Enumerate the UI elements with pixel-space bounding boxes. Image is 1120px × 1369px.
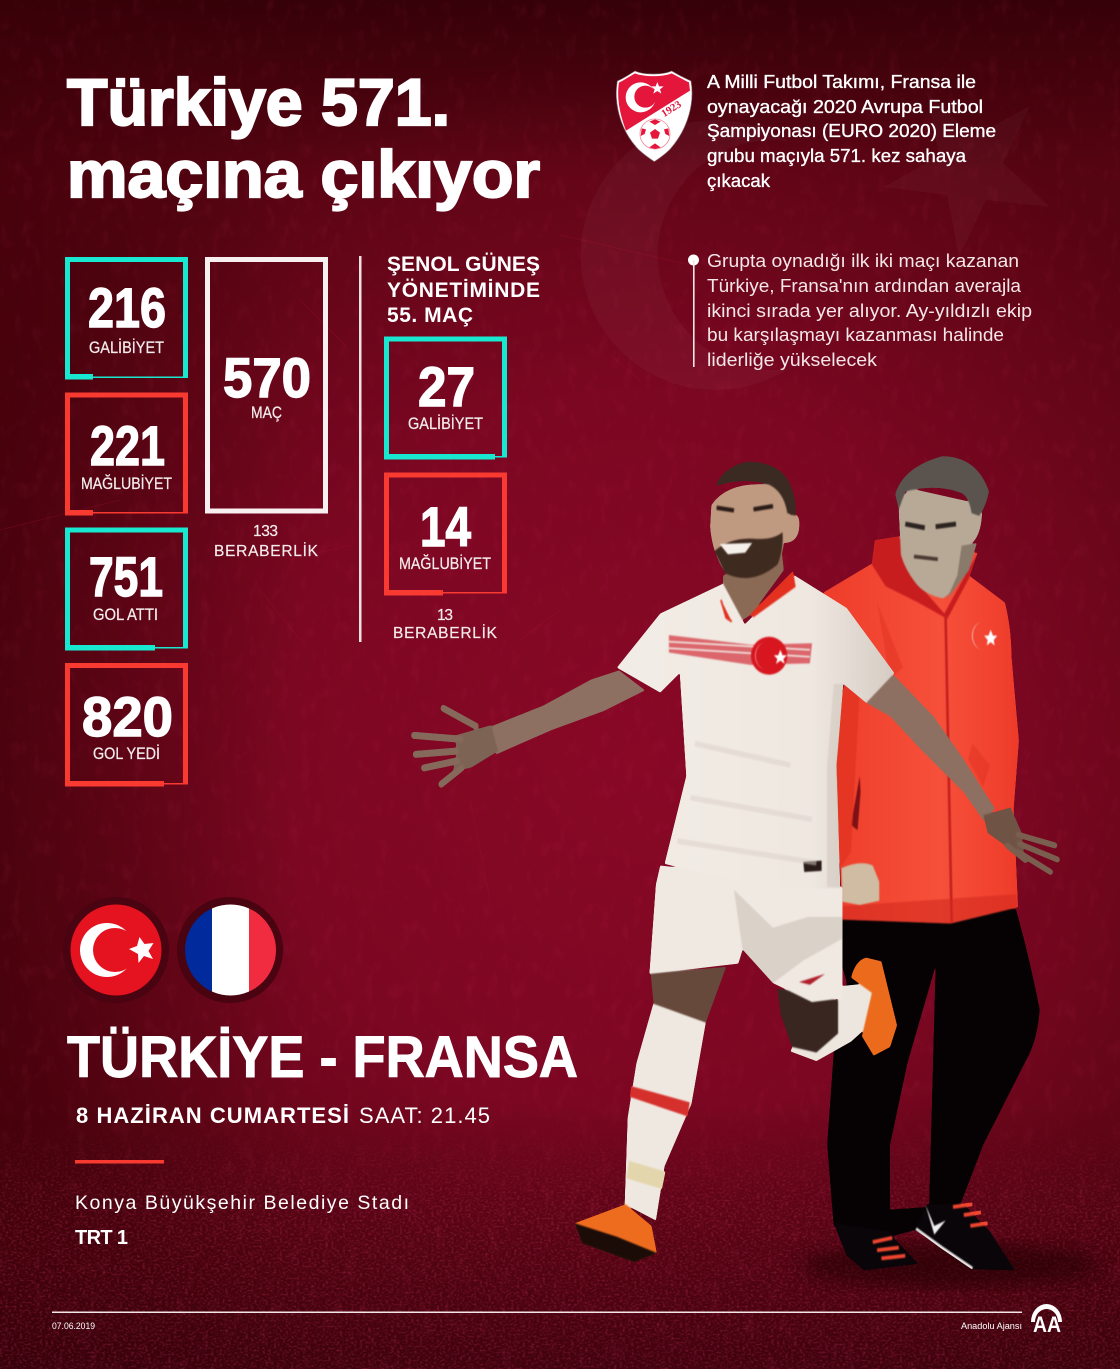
icon: Anadolu Agency logo: AA <box>1033 1312 1061 1337</box>
footer agency name: Anadolu Ajansı <box>961 1321 1022 1331</box>
stat box: 570 matches: MAÇ <box>251 404 282 422</box>
faint background crescent and star <box>581 93 1050 390</box>
stat box: 221 losses <box>65 395 188 516</box>
title <box>67 65 540 211</box>
player shorts <box>649 865 842 1002</box>
stat box: 820 goals conceded <box>65 666 188 786</box>
player left leg <box>625 967 726 1220</box>
bullet text with marker <box>688 250 1032 370</box>
player planted boot <box>575 1204 657 1262</box>
player shirt <box>617 573 894 889</box>
stat box: 820 goals conceded: GOL YEDİ <box>93 744 160 763</box>
draws: 133: BERABERLİK <box>214 542 319 560</box>
icon: Anadolu Agency logo <box>1031 1304 1062 1337</box>
stat box: 570 matches <box>208 260 326 511</box>
player neck <box>723 551 784 625</box>
bullet text with marker: Türkiye, Fransa'nın ardından averajla <box>707 275 1022 296</box>
player right arm and hand <box>866 673 1057 872</box>
footer date: 07.06.2019 <box>52 1321 95 1331</box>
stat box: 27 wins: 27 <box>418 355 475 418</box>
player raised boot <box>851 958 897 1056</box>
title: Türkiye 571. <box>67 65 450 139</box>
draws: 133: 133 <box>253 523 278 540</box>
player right leg <box>777 982 882 1061</box>
draws: 13: BERABERLİK <box>393 624 498 642</box>
draws: 133 <box>214 523 319 560</box>
intro text: grubu maçıyla 571. kez sahaya <box>707 145 967 166</box>
intro text: A Milli Futbol Takımı, Fransa ile <box>707 71 976 92</box>
stat box: 14 losses <box>384 475 507 596</box>
intro text: oynayacağı 2020 Avrupa Futbol <box>707 96 983 117</box>
icon: Turkish Football Federation crest: 1923 <box>660 99 684 120</box>
flag: France <box>177 897 283 1003</box>
coach right shoe <box>873 1204 1015 1270</box>
player figure <box>414 462 1057 1262</box>
stat box: 14 losses: MAĞLUBİYET <box>399 554 491 573</box>
icon: Turkish Football Federation crest <box>616 71 692 162</box>
coach figure <box>823 456 1040 1270</box>
stat box: 751 goals scored: GOL ATTI <box>93 606 158 624</box>
stat box: 216 wins <box>65 260 188 380</box>
stat box: 216 wins: GALİBİYET <box>89 338 164 357</box>
ground shadow under players <box>800 1243 1100 1287</box>
intro text: Şampiyonası (EURO 2020) Eleme <box>707 120 996 141</box>
stat box: 14 losses: 14 <box>420 495 471 558</box>
bullet text with marker: Grupta oynadığı ilk iki maçı kazanan <box>707 250 1019 271</box>
intro text <box>707 71 996 191</box>
draws: 13 <box>393 607 498 642</box>
coach head <box>895 456 989 600</box>
bullet text with marker: ikinci sırada yer alıyor. Ay-yıldızlı ekip <box>707 300 1032 321</box>
stat box: 221 losses: MAĞLUBİYET <box>81 474 172 493</box>
coach fist <box>842 863 879 905</box>
stat box: 221 losses: 221 <box>90 414 165 477</box>
flag: Türkiye <box>63 897 169 1003</box>
player head <box>710 462 799 578</box>
intro text: çıkacak <box>707 170 771 191</box>
draws: 13: 13 <box>437 607 453 624</box>
red accent line <box>75 1160 164 1164</box>
match date and time <box>76 1103 490 1128</box>
heading: Şenol Güneş: YÖNETİMİNDE <box>387 279 540 302</box>
player left arm and hand <box>414 670 645 784</box>
bullet text with marker: liderliğe yükselecek <box>707 349 878 370</box>
stat box: 751 goals scored <box>65 530 188 650</box>
match date and time: SAAT: 21.45 <box>359 1103 490 1128</box>
heading: Şenol Güneş <box>387 253 540 327</box>
broadcaster: TRT 1 <box>75 1227 128 1249</box>
vertical divider <box>359 256 362 642</box>
heading: Şenol Güneş: ŞENOL GÜNEŞ <box>387 253 540 276</box>
coach left shoe <box>834 1223 918 1270</box>
stat box: 27 wins: GALİBİYET <box>408 414 483 433</box>
match date and time: 8 HAZİRAN CUMARTESİ <box>76 1103 349 1128</box>
stadium: Konya Büyükşehir Belediye Stadı <box>75 1192 409 1214</box>
stat box: 27 wins <box>384 339 507 460</box>
stat box: 751 goals scored: 751 <box>89 545 163 608</box>
coach trousers <box>827 909 1040 1237</box>
bullet text with marker: bu karşılaşmayı kazanması halinde <box>707 324 1004 345</box>
stat box: 820 goals conceded: 820 <box>82 685 173 748</box>
match heading: TÜRKİYE - FRANSA <box>67 1025 578 1090</box>
footer line <box>52 1312 1022 1313</box>
stat box: 570 matches: 570 <box>223 346 311 409</box>
title: maçına çıkıyor <box>67 137 540 211</box>
stat box: 216 wins: 216 <box>88 276 166 339</box>
coach jacket <box>823 536 1019 923</box>
heading: Şenol Güneş: 55. MAÇ <box>387 304 473 327</box>
